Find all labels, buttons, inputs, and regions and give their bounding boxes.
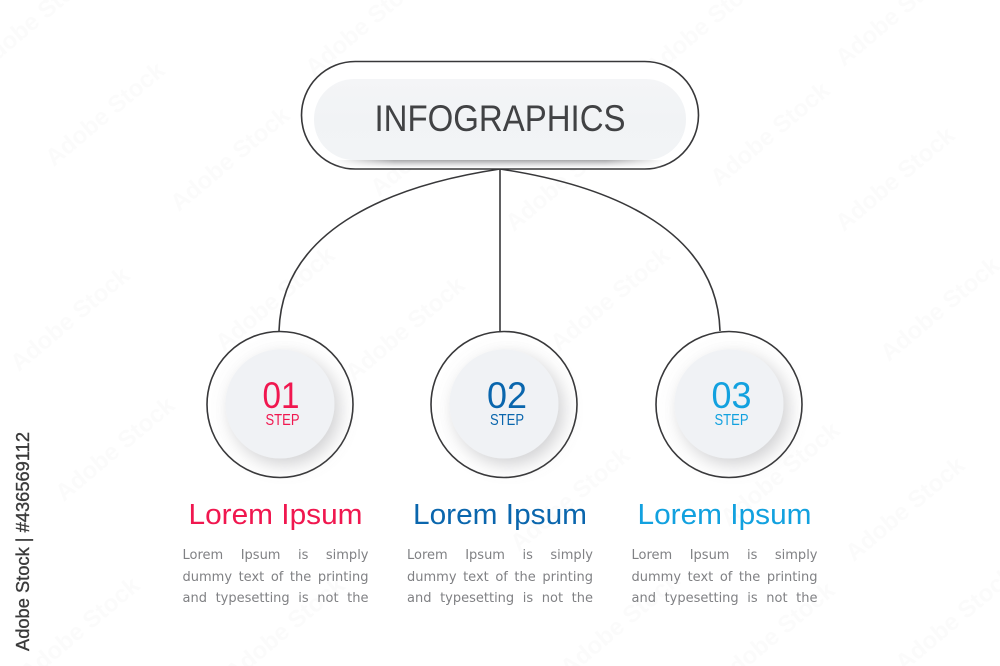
- step 01 badge: 01: [262, 375, 300, 416]
- title: INFOGRAPHICS: [374, 98, 626, 139]
- text block: step 03: Lorem Ipsum is simply: [632, 548, 818, 563]
- stock id sidebar: Adobe Stock | #436569112: [12, 432, 33, 651]
- watermark pattern: Adobe Stock: [340, 271, 471, 387]
- watermark pattern: Adobe Stock: [165, 101, 296, 217]
- watermark pattern: Adobe Stock: [830, 121, 961, 237]
- watermark pattern: Adobe Stock: [715, 416, 846, 532]
- text block: step 01: dummy text of the printing: [182, 570, 368, 584]
- step 02 badge: [431, 332, 577, 478]
- watermark pattern: Adobe Stock: [365, 86, 496, 202]
- text block: step 02: [407, 548, 593, 606]
- text block: step 01: Lorem Ipsum is simply: [182, 548, 368, 563]
- text block: step 02: Lorem Ipsum is simply: [407, 548, 593, 563]
- watermark pattern: Adobe Stock: [5, 261, 136, 377]
- text block: step 03: [632, 548, 818, 606]
- watermark pattern: Adobe Stock: [40, 56, 171, 172]
- heading: step 01: Lorem Ipsum: [188, 499, 362, 531]
- step 01 badge: [207, 332, 353, 478]
- heading: step 02: Lorem Ipsum: [413, 499, 587, 531]
- title pill: [302, 62, 698, 169]
- watermark pattern: Adobe Stock: [210, 241, 341, 357]
- watermark pattern: Adobe Stock: [505, 441, 636, 557]
- heading: step 03: Lorem Ipsum: [638, 499, 812, 531]
- step 03 badge: 03: [712, 375, 752, 416]
- connector lines: [279, 169, 720, 331]
- step 02 badge: STEP: [490, 412, 524, 429]
- step 03 badge: STEP: [714, 412, 748, 429]
- watermark pattern: Adobe Stock: [50, 391, 181, 507]
- step 02 badge: 02: [487, 375, 527, 416]
- watermark pattern: Adobe Stock: [500, 121, 631, 237]
- text block: step 02: and typesetting is not the: [407, 591, 593, 606]
- step 03 badge: [656, 332, 802, 478]
- watermark pattern: Adobe Stock: [545, 241, 676, 357]
- text block: step 01: [182, 548, 368, 606]
- text block: step 03: and typesetting is not the: [632, 591, 818, 606]
- text block: step 03: dummy text of the printing: [632, 570, 818, 584]
- watermark pattern: Adobe Stock: [705, 76, 836, 192]
- text block: step 01: and typesetting is not the: [182, 591, 368, 606]
- text block: step 02: dummy text of the printing: [407, 570, 593, 584]
- step 01 badge: STEP: [266, 412, 300, 429]
- watermark pattern: Adobe Stock: [840, 451, 971, 567]
